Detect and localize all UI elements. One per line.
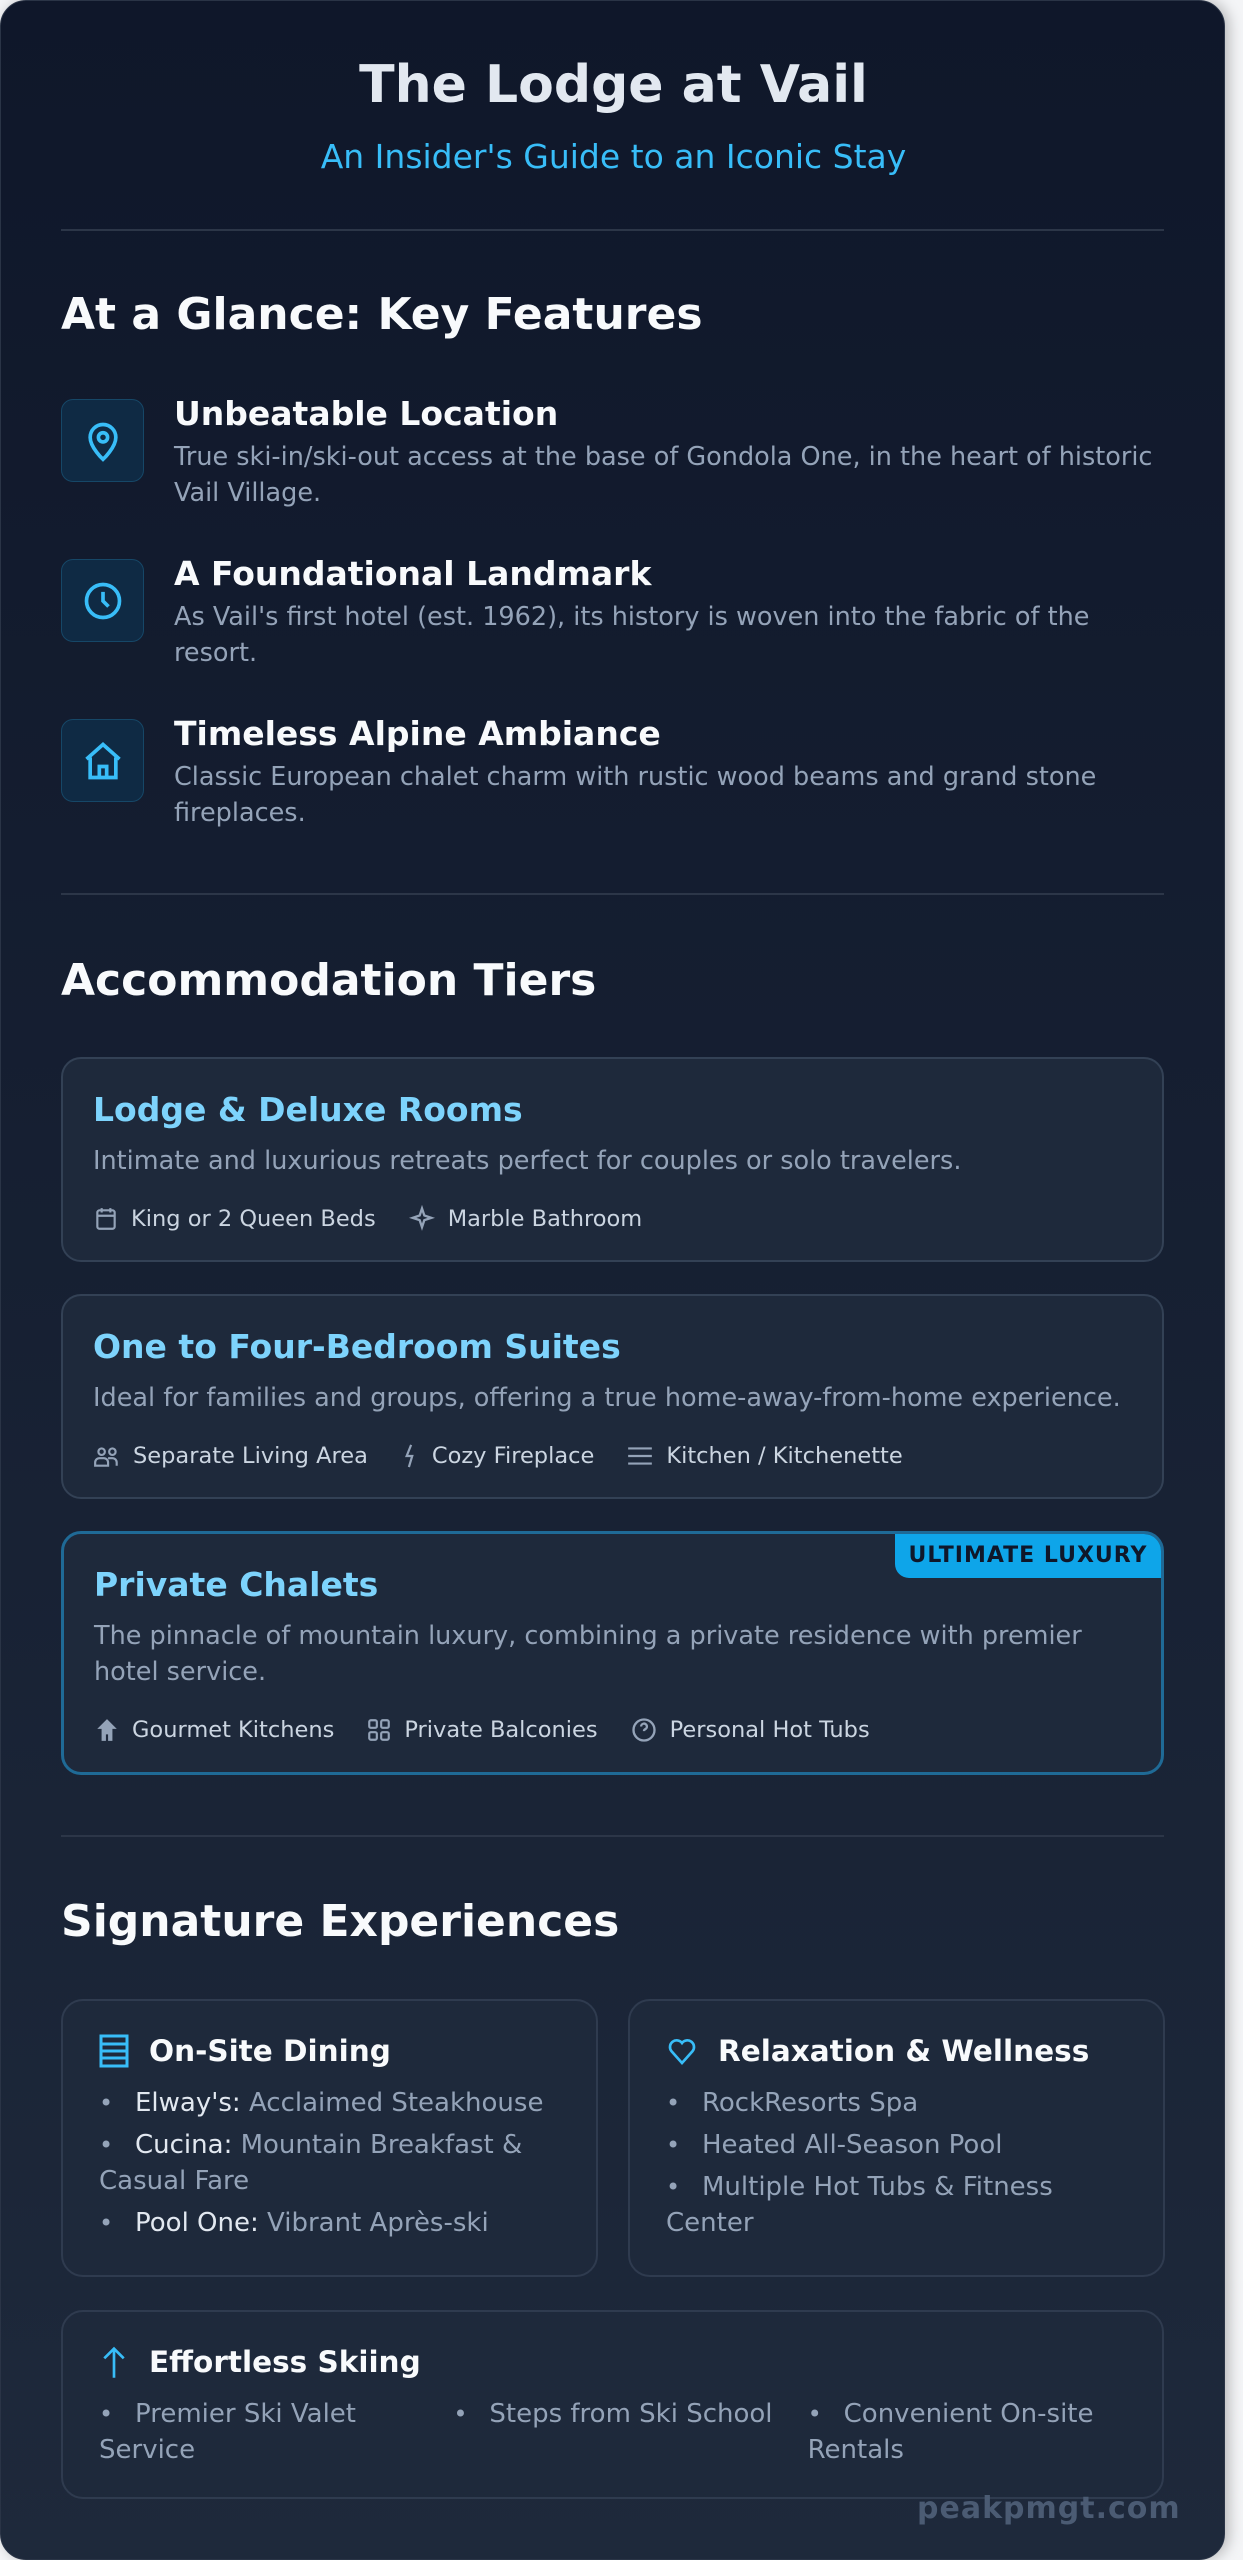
panel: skiing: Effortless Skiing (149, 2345, 421, 2379)
panel: dining: On-Site Dining (149, 2034, 391, 2068)
tier: suites: Cozy Fireplace (432, 1443, 594, 1469)
panel: wellness: Multiple Hot Tubs & Fitness Center (666, 2172, 1053, 2238)
panel: wellness: Relaxation & Wellness (718, 2034, 1089, 2068)
feature: ambiance (174, 714, 1096, 828)
tier: lodge rooms: King or 2 Queen Beds (131, 1206, 376, 1232)
tier: lodge rooms: Lodge & Deluxe Rooms (93, 1090, 523, 1129)
feature: location: Unbeatable Location (174, 394, 558, 433)
heading: signature experiences: Signature Experiences (61, 1896, 619, 1947)
icon: clock (61, 559, 144, 642)
subtitle: An Insider's Guide to an Iconic Stay (321, 137, 906, 176)
panel: dining: Pool One: Vibrant Après-ski (135, 2208, 489, 2238)
tier: private chalets: Gourmet Kitchens (132, 1717, 334, 1743)
panel: skiing: Steps from Ski School (489, 2399, 773, 2429)
feature: ambiance: Timeless Alpine Ambiance (174, 714, 661, 753)
feature: landmark: A Foundational Landmark (174, 554, 651, 593)
tier: lodge rooms: Marble Bathroom (448, 1206, 642, 1232)
watermark: peakpmgt.com (917, 2491, 1181, 2526)
icon: house (61, 719, 144, 802)
panel: skiing (61, 2310, 1164, 2499)
panel: dining (61, 1999, 598, 2277)
tier: private chalets: Private Chalets (94, 1565, 378, 1604)
heading: key features: At a Glance: Key Features (61, 289, 703, 340)
panel: dining: Cucina: Mountain Breakfast & Casual Fare (99, 2130, 522, 2196)
feature: landmark: As Vail's first hotel (est. 1962), its history is woven into the fabric of the resort. (174, 602, 1089, 668)
panel: wellness: RockResorts Spa (702, 2088, 918, 2118)
feature: location: True ski-in/ski-out access at the base of Gondola One, in the heart of historic Vail Village. (174, 442, 1152, 508)
feature: location (174, 394, 1152, 508)
tier: suites (61, 1294, 1164, 1499)
panel: skiing: Convenient On-site Rentals (808, 2399, 1093, 2465)
tier: suites: Separate Living Area (133, 1443, 368, 1469)
panel: wellness: Heated All-Season Pool (702, 2130, 1002, 2160)
badge: ultimate luxury (895, 1534, 1161, 1578)
feature: landmark (174, 554, 1089, 668)
tier: suites: Kitchen / Kitchenette (666, 1443, 903, 1469)
tier: private chalets: The pinnacle of mountain luxury, combining a private residence with premier hotel service. (94, 1621, 1082, 1687)
title: The Lodge at Vail (359, 55, 868, 115)
heading: accommodation: Accommodation Tiers (61, 955, 596, 1006)
panel: wellness (628, 1999, 1165, 2277)
tier: suites: Ideal for families and groups, offering a true home-away-from-home experience. (93, 1383, 1121, 1413)
tier: suites: One to Four-Bedroom Suites (93, 1327, 621, 1366)
feature: ambiance: Classic European chalet charm with rustic wood beams and grand stone fireplaces. (174, 762, 1096, 828)
tier: private chalets: Personal Hot Tubs (670, 1717, 870, 1743)
tier: private chalets (61, 1531, 1164, 1775)
badge: ultimate luxury: ULTIMATE LUXURY (909, 1543, 1147, 1568)
tier: lodge rooms (61, 1057, 1164, 1262)
icon: location pin (61, 399, 144, 482)
panel: skiing: Premier Ski Valet Service (99, 2399, 356, 2465)
tier: lodge rooms: Intimate and luxurious retreats perfect for couples or solo travelers. (93, 1146, 961, 1176)
tier: private chalets: Private Balconies (404, 1717, 598, 1743)
panel: dining: Elway's: Acclaimed Steakhouse (135, 2088, 543, 2118)
